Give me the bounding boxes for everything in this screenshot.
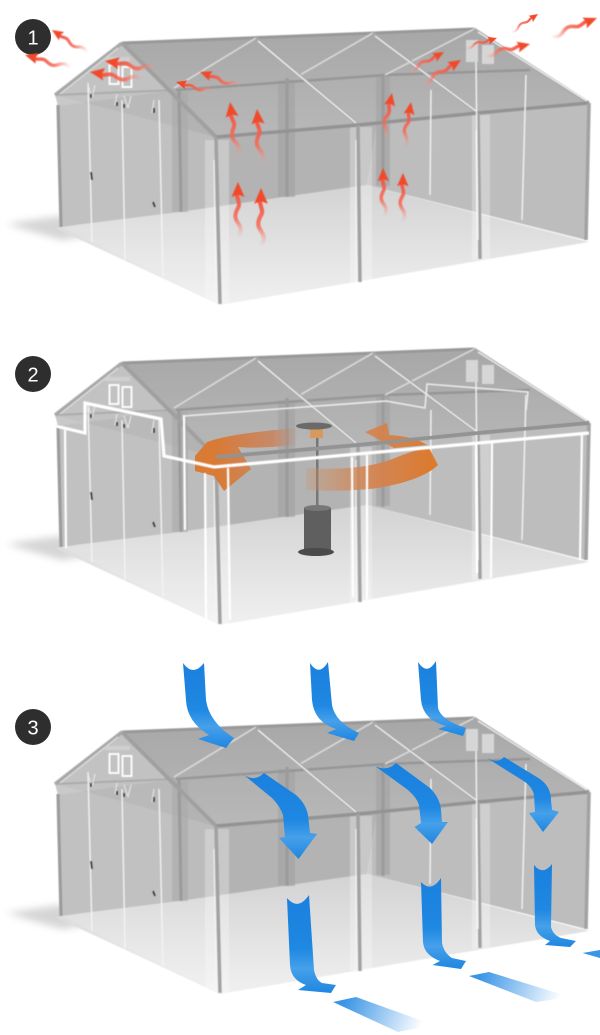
faded blue streak centre (469, 972, 570, 1002)
panel: scene 2, heater with circulating air (6, 349, 589, 625)
orange arrow right (306, 423, 438, 491)
orange arrow left (195, 428, 297, 491)
badge 2 (15, 356, 51, 392)
tent 3 (6, 718, 589, 994)
blue arrows passing through the roof (244, 757, 559, 859)
badge 1 (15, 19, 51, 55)
blue arrows exiting at floor level (287, 864, 576, 993)
panel: scene 3, cool air blowing through (6, 661, 600, 1032)
heat arrows rising inside the tent (224, 92, 416, 247)
badge 3 (15, 709, 51, 745)
faded blue streak left (333, 997, 434, 1032)
heat arrows escaping at left gable (23, 26, 243, 97)
badge 1: 1 (27, 28, 39, 50)
tent 1 (6, 29, 589, 305)
white frame outline of opened walls (56, 384, 589, 620)
patio heater (296, 422, 334, 556)
badge 3: 3 (27, 718, 39, 740)
tent 2 (6, 349, 589, 625)
front eave over arrows (216, 423, 589, 457)
badge 2: 2 (27, 364, 39, 386)
blue arrows entering over the roof (183, 661, 466, 748)
blue streak at right edge (582, 950, 600, 958)
panel: scene 1, warm air rising (6, 11, 599, 305)
heat arrows escaping at right gable (406, 11, 599, 90)
